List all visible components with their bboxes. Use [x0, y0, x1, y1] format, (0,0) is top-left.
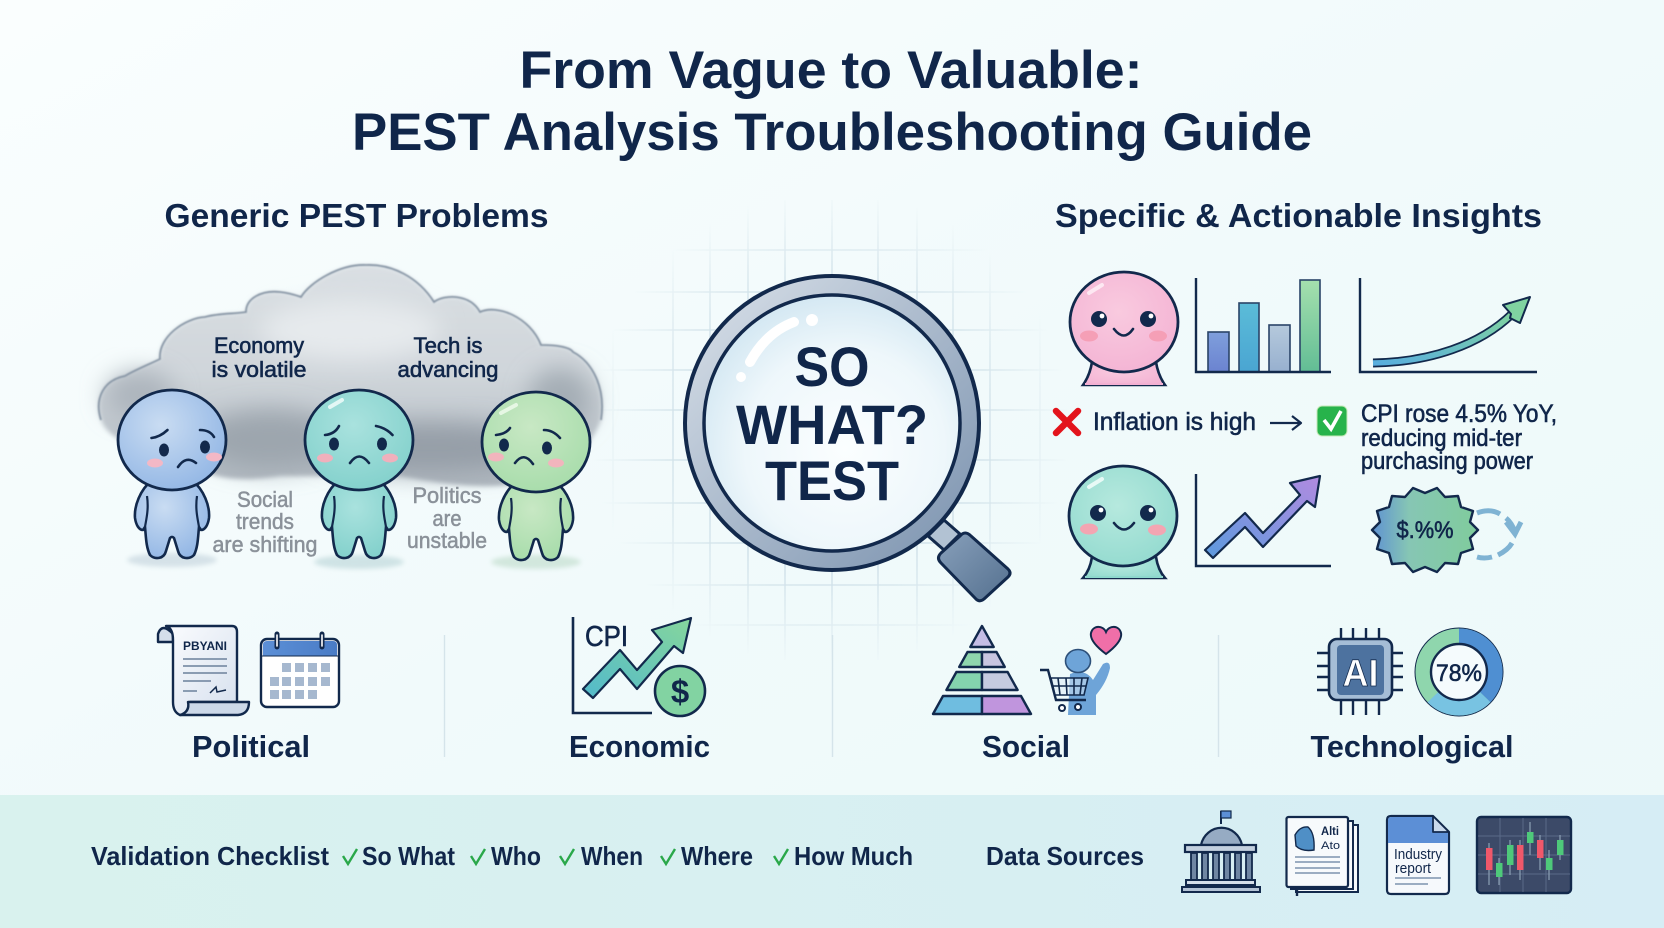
icon: pyramid	[933, 626, 1031, 714]
icon: newspaper stack: Alti	[1321, 824, 1339, 838]
icon: CPI chart with dollar coin: $	[671, 673, 689, 710]
faded text: politics: Politics	[412, 483, 482, 508]
red cross	[1056, 411, 1078, 433]
icon: AI chip	[1317, 628, 1403, 715]
faded text: social trends: trends	[236, 509, 294, 534]
dashed cycle arrow	[1477, 511, 1521, 558]
cloud text: tech: Tech is	[414, 333, 482, 358]
data badge	[1372, 488, 1478, 572]
label: economic: Economic	[569, 729, 710, 764]
cloud text: tech	[398, 333, 498, 382]
sad green character	[482, 392, 590, 569]
validation checklist: Where	[681, 841, 753, 871]
icon: scroll	[158, 626, 249, 715]
curved growth chart	[1360, 278, 1537, 372]
sad teal character	[305, 390, 413, 569]
storm cloud	[99, 265, 602, 486]
lens text: TEST	[765, 449, 899, 512]
check marks	[343, 849, 788, 864]
validation checklist: Validation Checklist	[91, 841, 329, 871]
title: From Vague to Valuable:	[520, 41, 1142, 100]
title	[352, 41, 1312, 162]
PEST category: economic	[569, 617, 710, 764]
icon: newspaper stack: Ato	[1321, 840, 1340, 852]
icon: scroll: PBYANI	[183, 639, 227, 653]
cloud text: tech: advancing	[398, 357, 498, 382]
icon: CPI chart with dollar coin	[573, 617, 705, 716]
magnifier handle	[928, 520, 1010, 601]
validation checklist: Who	[491, 841, 541, 871]
arrow: vague to specific	[1270, 416, 1301, 430]
sad blue character	[118, 390, 226, 567]
faded text: social trends	[212, 487, 318, 557]
cloud text: economy	[212, 333, 306, 382]
icon: AI chip: AI	[1342, 653, 1378, 695]
cloud text: economy: is volatile	[212, 357, 306, 382]
faded text: politics: unstable	[407, 528, 487, 553]
label: technological: Technological	[1310, 729, 1514, 764]
specific statement: purchasing power	[1361, 448, 1533, 475]
heading: generic problems: Generic PEST Problems	[164, 197, 548, 234]
icon: heart	[1091, 627, 1121, 654]
bar chart	[1196, 278, 1331, 372]
icon: industry report: report	[1395, 860, 1432, 877]
icon: government building	[1182, 811, 1260, 892]
icon: candlestick market screen	[1477, 817, 1571, 893]
lens text: SO	[794, 335, 870, 398]
icon: CPI chart with dollar coin: CPI	[585, 621, 628, 653]
icon: shopper with cart	[1040, 650, 1110, 715]
icon: industry report: Industry	[1394, 846, 1442, 863]
happy pink character	[1070, 272, 1178, 385]
data sources label: Data Sources	[986, 841, 1144, 871]
faded text: social trends: are shifting	[212, 532, 318, 557]
cloud text: economy: Economy	[214, 333, 304, 358]
lens text	[736, 335, 928, 512]
data sources	[986, 811, 1571, 896]
icon: industry report	[1387, 816, 1449, 894]
data badge: $.%%	[1396, 517, 1454, 544]
validation checklist: So What	[362, 841, 455, 871]
zigzag growth chart	[1196, 474, 1331, 566]
PEST category: technological	[1310, 628, 1514, 764]
icon: newspaper stack	[1286, 817, 1358, 896]
magnifier lens	[685, 276, 979, 570]
magnifying glass: so what test	[685, 276, 1010, 601]
label: social: Social	[982, 729, 1070, 764]
specific statement: reducing mid-ter	[1361, 425, 1522, 452]
faded text: politics	[407, 483, 487, 553]
bottom band	[0, 795, 1664, 928]
vague statement: Inflation is high	[1093, 408, 1256, 436]
panel: generic PEST problems	[99, 265, 602, 569]
validation checklist: When	[581, 841, 643, 871]
faded text: social trends: Social	[237, 487, 293, 512]
heading: specific insights: Specific & Actionable Insights	[1055, 197, 1542, 234]
icon: 78% donut	[1414, 628, 1504, 716]
specific statement: CPI rose 4.5% YoY,	[1361, 400, 1557, 428]
panel: specific insights	[1056, 272, 1557, 578]
green check box	[1317, 406, 1347, 436]
specific statement	[1361, 400, 1557, 475]
lens text: WHAT?	[736, 393, 928, 456]
happy mint character	[1069, 466, 1177, 578]
label: political: Political	[192, 729, 310, 764]
icon: calendar	[261, 634, 339, 707]
faded text: politics: are	[432, 506, 462, 531]
validation checklist: How Much	[794, 841, 913, 871]
PEST category: political	[158, 626, 339, 764]
validation checklist	[91, 841, 913, 871]
title: PEST Analysis Troubleshooting Guide	[352, 103, 1312, 162]
icon: 78% donut: 78%	[1436, 660, 1482, 687]
PEST category: social	[933, 626, 1121, 764]
